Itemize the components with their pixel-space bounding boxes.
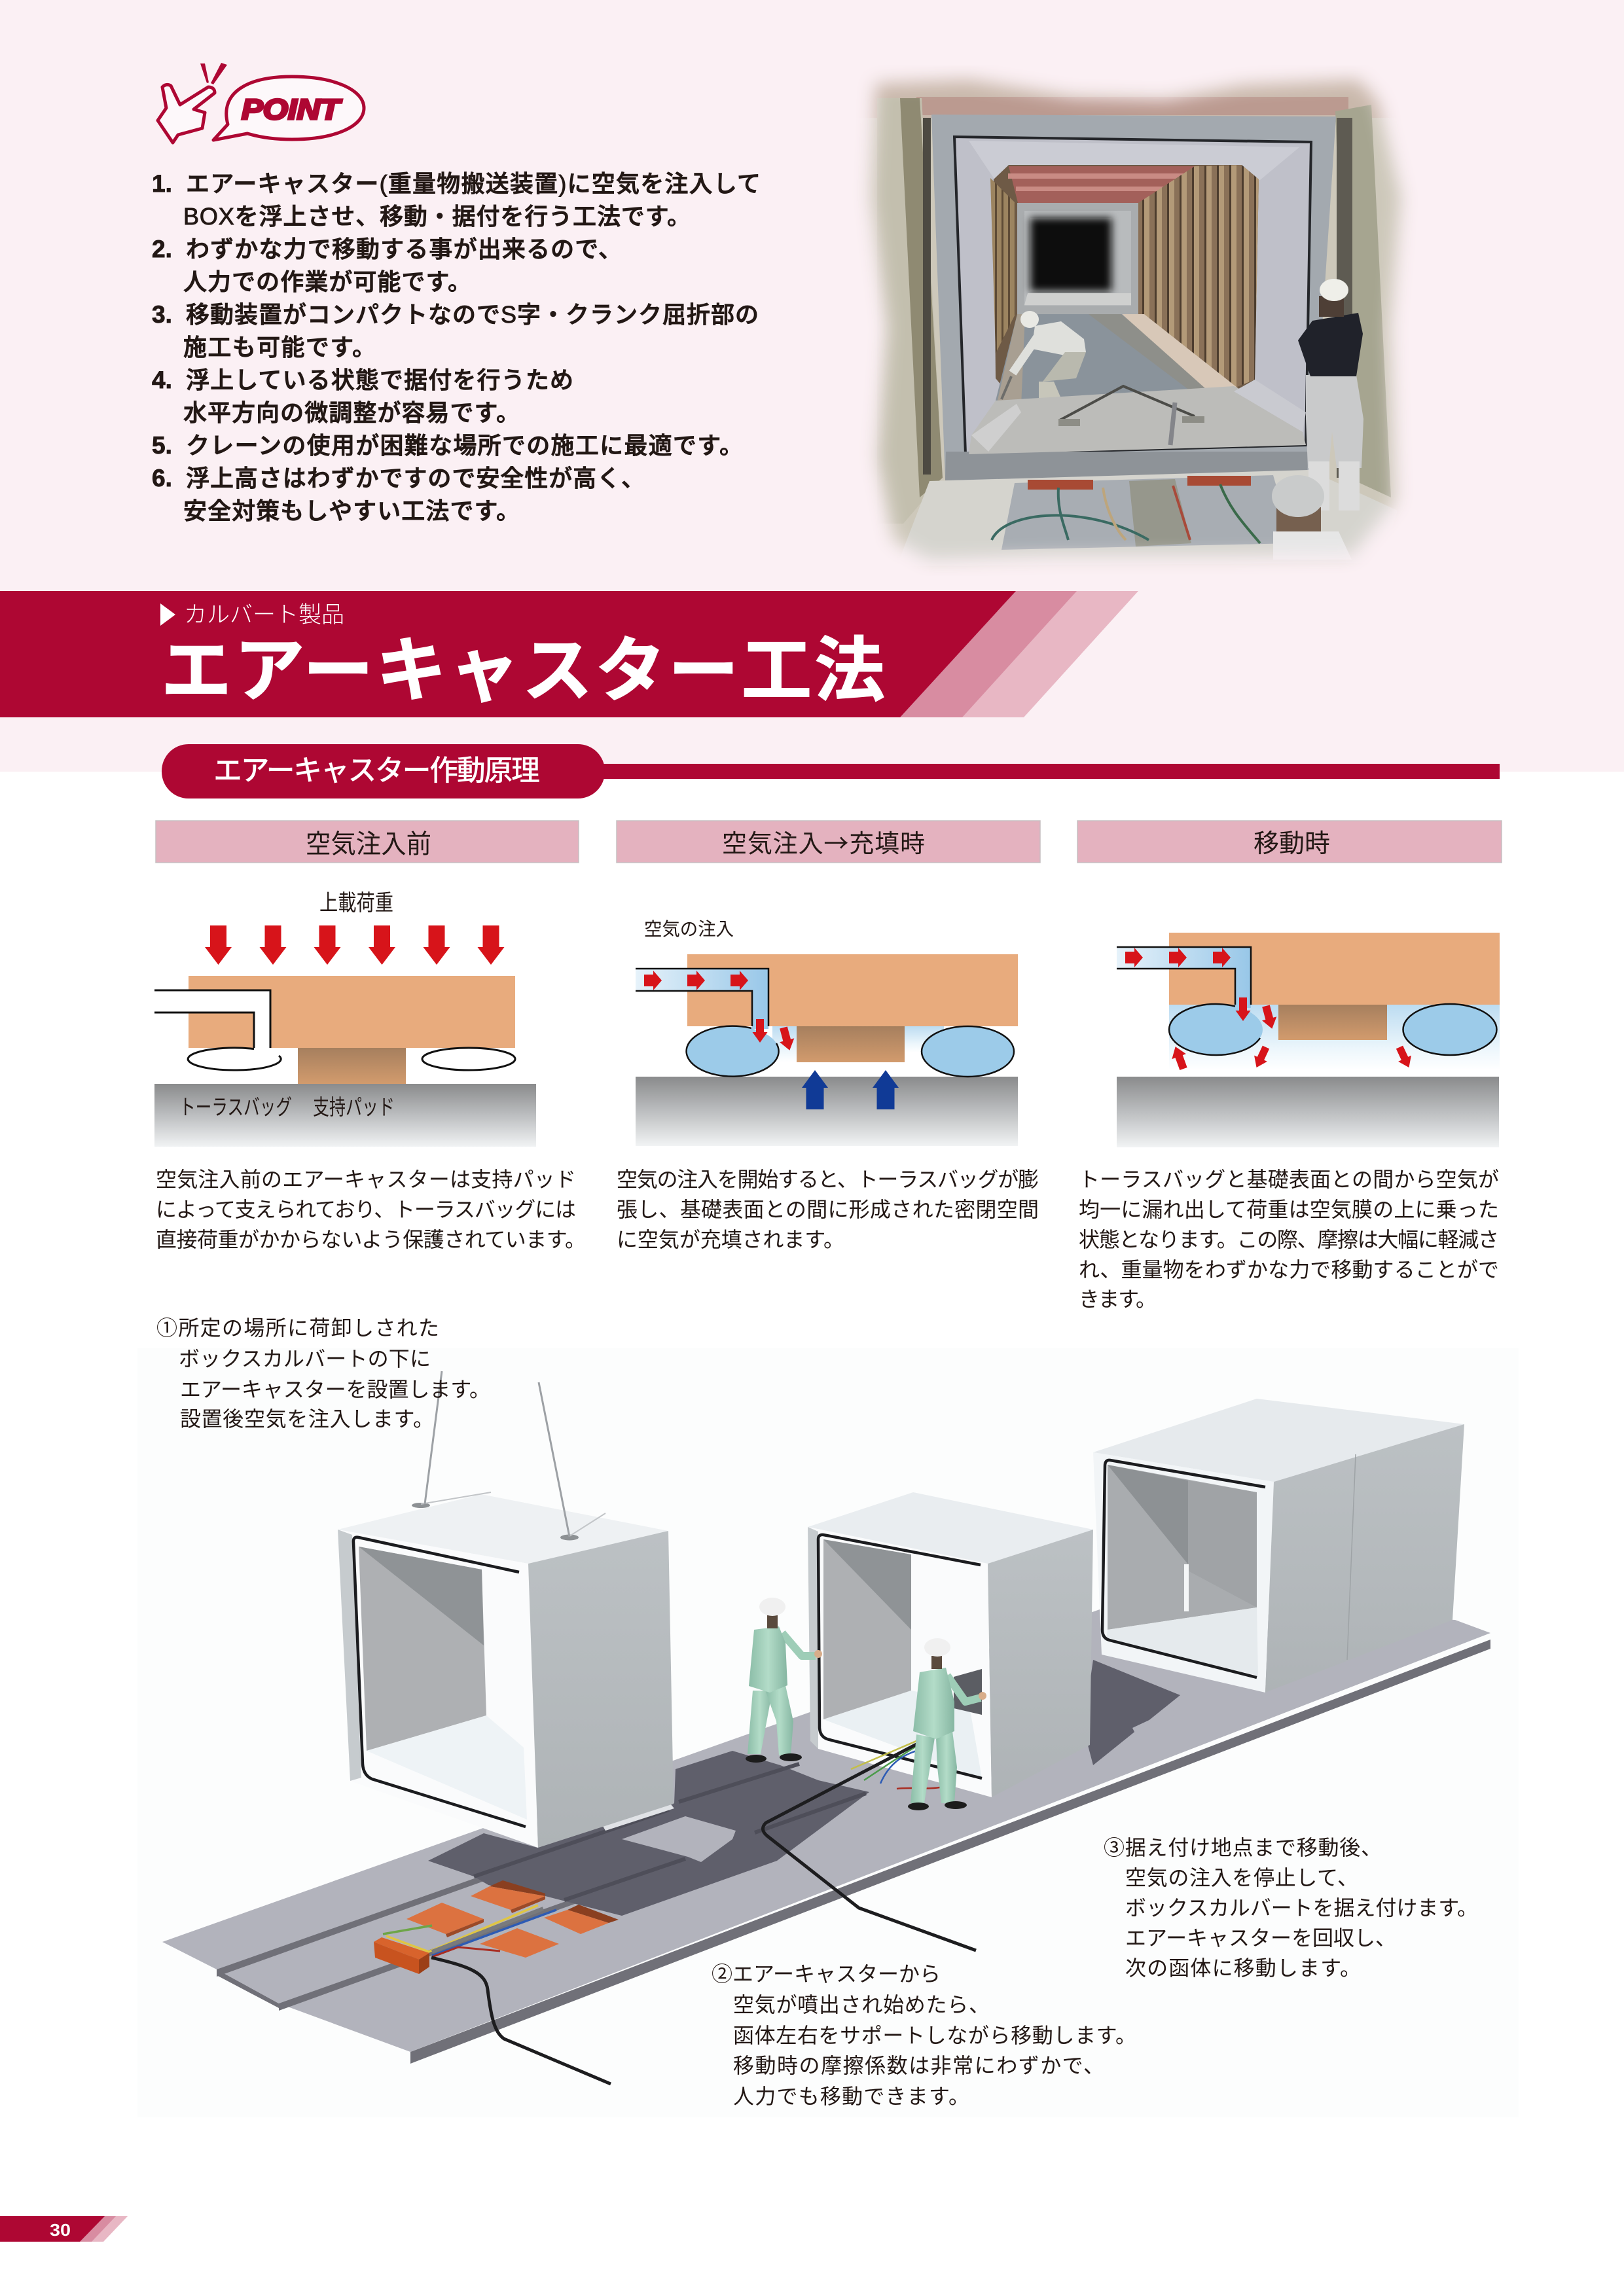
caption: step 1: ボックスカルバートの下に — [179, 1347, 431, 1371]
description: 空気の注入を開始すると、トーラスバッグが膨 — [617, 1168, 1039, 1191]
description: によって支えられており、トーラスバッグには — [156, 1198, 576, 1221]
numbered list of key points: 2. — [152, 236, 172, 262]
illustration: three-step construction scene — [137, 1348, 1519, 2117]
tunnel interior visible through the opening — [990, 165, 1259, 406]
worker 2 — [908, 1638, 986, 1810]
numbered list of key points: クレーンの使用が困難な場所での施工に最適です。 — [186, 432, 743, 459]
diagram: injection — [636, 919, 1018, 1146]
numbered list of key points: エアーキャスター(重量物搬送装置)に空気を注入して — [186, 170, 761, 197]
numbered list of key points: BOXを浮上させ、移動・据付を行う工法です。 — [183, 203, 691, 230]
caption: step 3: エアーキャスターを回収し、 — [1125, 1926, 1396, 1950]
caption: step 3: ③据え付け地点まで移動後、 — [1104, 1836, 1382, 1859]
box culvert 2 being moved — [808, 1492, 1093, 1797]
numbered list of key points: 安全対策もしやすい工法です。 — [183, 497, 520, 524]
heading bar — [156, 821, 579, 863]
base slab with grooves and shadows — [162, 1609, 1490, 2064]
caption: step 3: 次の函体に移動します。 — [1125, 1956, 1361, 1980]
panel: during movement — [1077, 821, 1502, 1311]
diagram: before injection: 支持パッド — [313, 1095, 395, 1119]
caption: step 1: 設置後空気を注入します。 — [180, 1407, 434, 1431]
black air hose, front — [431, 1958, 611, 2084]
description: 直接荷重がかからないよう保護されています。 — [156, 1228, 586, 1251]
numbered list of key points — [152, 170, 761, 524]
page number tab — [0, 2216, 128, 2242]
main title: エアーキャスター工法 — [161, 631, 885, 710]
caption: step 1: ①所定の場所に荷卸しされた — [156, 1316, 439, 1340]
numbered list of key points: 浮上高さはわずかですので安全性が高く、 — [186, 465, 645, 492]
heading bar: 空気注入→充填時 — [722, 823, 925, 859]
numbered list of key points: 移動装置がコンパクトなのでS字・クランク屈折部の — [186, 301, 759, 328]
diagram: movement — [1117, 933, 1500, 1147]
heading bar — [1077, 821, 1502, 863]
description: れ、重量物をわずかな力で移動することがで — [1079, 1258, 1499, 1282]
description — [156, 1168, 586, 1251]
numbered list of key points: 浮上している状態で据付を行うため — [186, 367, 573, 393]
numbered list of key points: 水平方向の微調整が容易です。 — [183, 399, 520, 426]
caption: step 3: ボックスカルバートを据え付けます。 — [1125, 1896, 1478, 1920]
panel: before air injection — [154, 821, 586, 1251]
numbered list of key points: 施工も可能です。 — [183, 334, 376, 361]
caption: step 3: 空気の注入を停止して、 — [1125, 1866, 1358, 1890]
numbered list of key points: 人力での作業が可能です。 — [183, 268, 471, 295]
numbered list of key points: わずかな力で移動する事が出来るので、 — [186, 236, 622, 262]
description: 張し、基礎表面との間に形成された密閉空間 — [617, 1198, 1039, 1221]
description — [617, 1168, 1039, 1251]
section heading: operating principle — [162, 744, 1500, 798]
panel: injection and filling — [617, 821, 1040, 1251]
page number tab: 30 — [50, 2220, 71, 2240]
description: トーラスバッグと基礎表面との間から空気が — [1079, 1168, 1499, 1191]
icon: pointing hand and POINT speech bubble: POINT — [242, 94, 342, 126]
category label: カルバート製品 — [184, 602, 344, 628]
box culvert 1 suspended — [338, 1371, 674, 1848]
worker 1 — [746, 1598, 822, 1763]
description — [1079, 1168, 1499, 1311]
box culvert 3 placed — [1093, 1399, 1464, 1693]
numbered list of key points: 1. — [152, 170, 172, 197]
caption: step 1: エアーキャスターを設置します。 — [180, 1378, 490, 1401]
caption: step 3 — [1104, 1836, 1478, 1980]
pink upper background — [0, 0, 1624, 772]
diagram: before injection: 上載荷重 — [319, 891, 393, 916]
caption: step 2: 空気が噴出され始めたら、 — [733, 1993, 990, 2017]
description: 均一に漏れ出して荷重は空気膜の上に乗った — [1079, 1198, 1499, 1221]
caption: step 2: 移動時の摩擦係数は非常にわずかで、 — [733, 2054, 1104, 2077]
caption: step 1 — [156, 1316, 490, 1431]
description: 状態となります。この際、摩擦は大幅に軽減さ — [1079, 1228, 1499, 1251]
bent worker — [1001, 311, 1086, 404]
description: 空気注入前のエアーキャスターは支持パッド — [156, 1168, 576, 1191]
foreground worker helmet — [1272, 475, 1352, 560]
caption: step 2: 人力でも移動できます。 — [733, 2085, 969, 2108]
lower floor, air casters and hoses — [897, 470, 1398, 566]
caption: step 2: 函体左右をサポートしながら移動します。 — [733, 2024, 1136, 2047]
heading bar: 空気注入前 — [306, 830, 431, 859]
caption: step 2: ②エアーキャスターから — [712, 1962, 941, 1986]
caption: step 2 — [712, 1962, 1136, 2108]
section heading: operating principle: エアーキャスター作動原理 — [213, 755, 540, 787]
colored hoses and black hose at box 2 — [763, 1741, 976, 1950]
air caster pads and control unit — [374, 1880, 619, 1974]
diagram: before injection: トーラスバッグ — [179, 1095, 292, 1119]
title band with chevrons — [0, 591, 1138, 717]
heading bar — [617, 821, 1040, 863]
heading bar: 移動時 — [1254, 830, 1330, 858]
diagram: before injection — [154, 891, 536, 1147]
numbered list of key points: 6. — [152, 465, 172, 492]
diagram: injection: 空気の注入 — [644, 919, 734, 939]
numbered list of key points: 3. — [152, 301, 172, 328]
standing worker — [1298, 279, 1363, 511]
icon: pointing hand and POINT speech bubble — [158, 63, 364, 143]
photo: box culvert being moved by workers — [851, 65, 1427, 576]
description: に空気が充填されます。 — [617, 1228, 844, 1251]
numbered list of key points: 5. — [152, 432, 172, 459]
description: きます。 — [1079, 1287, 1157, 1311]
numbered list of key points: 4. — [152, 367, 172, 393]
